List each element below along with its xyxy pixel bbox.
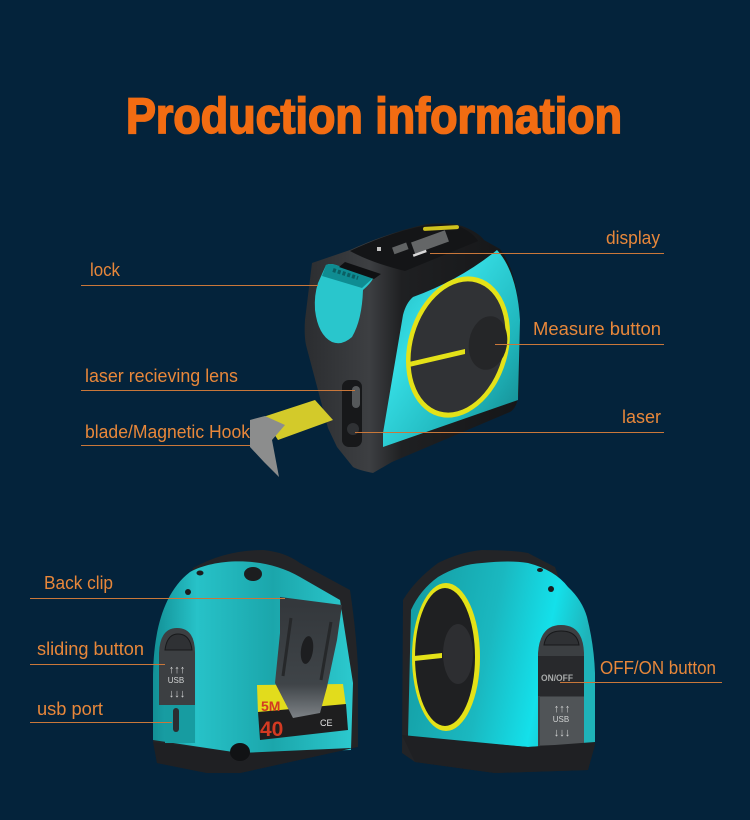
teal shell xyxy=(153,561,353,753)
tape blade xyxy=(263,400,333,440)
label: sliding button: sliding button xyxy=(37,638,144,659)
yellow ring dial xyxy=(390,264,526,430)
usb cover: USB xyxy=(553,715,569,724)
yellow dial bar xyxy=(414,653,442,661)
usb cover xyxy=(540,697,584,745)
product: front view of tape measure xyxy=(250,223,526,477)
lens and laser window xyxy=(342,380,362,447)
yellow dial bar xyxy=(409,349,465,367)
yellow ring dial xyxy=(412,583,480,731)
display panel xyxy=(350,224,478,271)
label: lock: lock xyxy=(90,259,121,280)
spec label: 40 xyxy=(260,718,283,741)
on/off switch: ON/OFF xyxy=(541,673,573,683)
product: back view with clip xyxy=(153,550,358,773)
sliding button: ↓↓↓ xyxy=(169,688,185,700)
label: display: display xyxy=(606,227,661,248)
usb port xyxy=(165,705,195,743)
lock slider xyxy=(315,262,381,343)
usb cover: ↓↓↓ xyxy=(554,727,570,739)
spec label xyxy=(257,684,348,741)
usb cover: ↑↑↑ xyxy=(554,703,570,715)
body xyxy=(153,550,358,773)
measure button xyxy=(465,313,511,373)
sliding button: ↑↑↑ xyxy=(169,664,185,676)
label: laser: laser xyxy=(622,406,661,427)
title: Production information xyxy=(126,88,622,144)
label: laser recieving lens: laser recieving lens xyxy=(85,365,238,386)
bottom band xyxy=(402,735,595,773)
mounting holes xyxy=(537,568,543,572)
spec label: CE xyxy=(320,718,333,728)
label: sliding button xyxy=(30,638,165,664)
bottom band xyxy=(153,742,358,773)
magnetic hook xyxy=(250,416,285,477)
teal shell xyxy=(408,562,595,747)
label: OFF/ON button: OFF/ON button xyxy=(600,657,716,678)
spec label: 5M xyxy=(261,698,280,714)
label: blade/Magnetic Hook: blade/Magnetic Hook xyxy=(85,421,251,442)
sliding button: USB xyxy=(168,676,184,685)
sliding button xyxy=(159,628,195,705)
on/off switch xyxy=(538,656,584,696)
mounting holes xyxy=(244,567,262,581)
measure button xyxy=(443,624,473,684)
switch housing xyxy=(538,625,584,747)
device body xyxy=(305,223,520,473)
product: side view with power switch xyxy=(402,550,595,773)
label: Back clip: Back clip xyxy=(44,572,113,593)
belt clip xyxy=(275,597,342,718)
body xyxy=(402,550,595,773)
teal side panel xyxy=(383,250,520,447)
label: Measure button: Measure button xyxy=(533,318,661,339)
label: usb port: usb port xyxy=(37,698,103,719)
